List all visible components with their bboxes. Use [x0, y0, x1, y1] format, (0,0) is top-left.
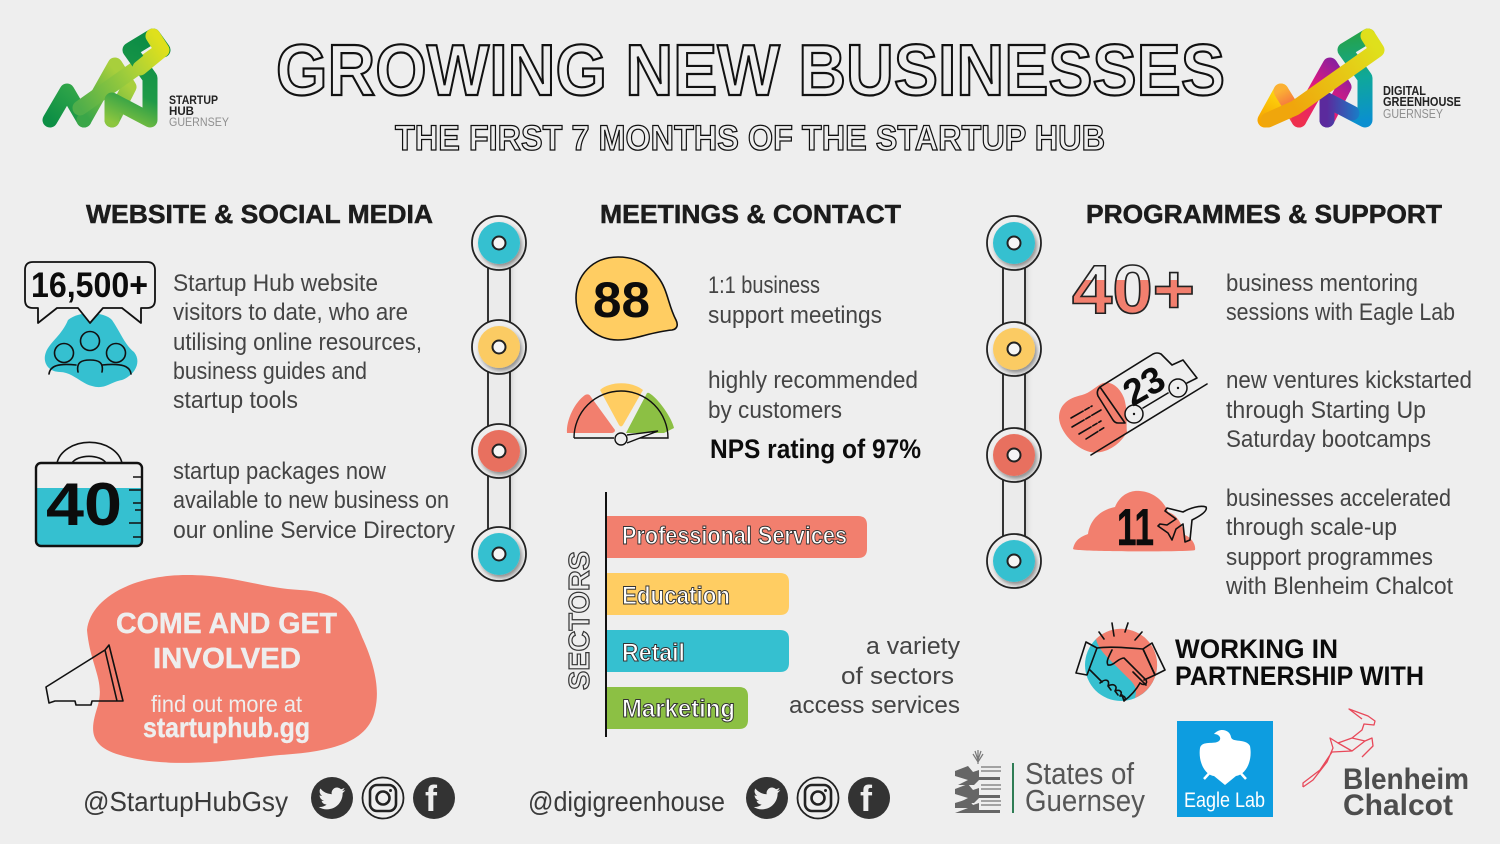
logo: States of Guernsey: States of	[1025, 756, 1134, 791]
icon: megaphone	[46, 645, 123, 705]
text: businesses accelerated: businesses accelerated	[1226, 485, 1451, 512]
text: website visitors: utilising online resources,	[173, 329, 422, 356]
text: startup packages: our online Service Directory	[173, 517, 455, 544]
text: startup packages	[173, 458, 455, 544]
panel: website and social media	[25, 199, 455, 546]
title: GROWING NEW BUSINESSES	[276, 31, 1225, 111]
heading: meetings and contact: MEETINGS & CONTACT	[600, 199, 901, 229]
icon: 11 cloud and plane: 11	[1117, 499, 1154, 557]
social: StartupHubGsy: @StartupHubGsy	[83, 786, 288, 817]
icon: 40 startup package	[36, 442, 142, 546]
icon: 40+ outlined number: 40+	[1072, 251, 1195, 328]
text: variety of sectors	[789, 633, 960, 719]
text: support meetings: support meetings	[708, 302, 882, 329]
logo: Digital Greenhouse Guernsey: DIGITAL	[1383, 84, 1426, 98]
text: new ventures: Saturday bootcamps	[1226, 426, 1431, 453]
text: variety of sectors: of sectors	[841, 663, 954, 690]
icon: 23 car	[1059, 353, 1207, 455]
icon: twitter	[746, 777, 788, 819]
logo: Startup Hub Guernsey: HUB	[169, 104, 194, 118]
text: website visitors: business guides and	[173, 358, 367, 385]
text: NPS rating: NPS rating of 97%	[710, 434, 921, 464]
logo: Startup Hub Guernsey	[50, 36, 229, 129]
bar chart: sectors: Retail	[622, 639, 685, 667]
text: NPS rating	[708, 367, 921, 464]
text: startup packages: available to new business on	[173, 487, 449, 514]
icon: instagram	[362, 778, 404, 818]
text: website visitors: visitors to date, who are	[173, 299, 408, 326]
connector: right timeline	[987, 216, 1041, 588]
icon: 88 yellow blob	[576, 257, 677, 340]
text: variety of sectors: a variety	[866, 633, 960, 660]
icon: recommendation gauge	[567, 383, 674, 445]
text: new ventures: through Starting Up	[1226, 397, 1426, 424]
callout: come and get involved: COME AND GET	[116, 608, 337, 640]
logo: States of Guernsey: Guernsey	[1025, 783, 1145, 818]
social: digigreenhouse: @digigreenhouse	[528, 786, 725, 817]
icon: facebook: f	[425, 778, 438, 819]
text: businesses accelerated: through scale-up	[1226, 514, 1397, 541]
icon: facebook	[848, 777, 890, 819]
social: StartupHubGsy	[83, 777, 455, 819]
text: businesses accelerated	[1225, 485, 1453, 600]
text: website visitors	[173, 270, 422, 414]
icon: facebook	[413, 777, 455, 819]
icon: facebook: f	[860, 778, 873, 819]
logo: Digital Greenhouse Guernsey	[1265, 36, 1461, 121]
icon: twitter	[311, 777, 353, 819]
text: startup packages: startup packages now	[173, 458, 387, 485]
text: support meetings	[708, 272, 882, 329]
icon: people blob	[45, 313, 137, 387]
icon: instagram	[798, 778, 838, 818]
text: variety of sectors: access services	[789, 692, 960, 719]
text: NPS rating: highly recommended	[708, 367, 918, 394]
heading: website and social media: WEBSITE & SOCIAL MEDIA	[86, 199, 433, 229]
text: businesses accelerated: support programmes	[1226, 544, 1433, 571]
logo: Digital Greenhouse Guernsey: GREENHOUSE	[1383, 95, 1461, 109]
text: mentoring sessions: sessions with Eagle Lab	[1226, 299, 1455, 326]
heading: working in partnership: WORKING IN	[1175, 634, 1338, 664]
callout: come and get involved	[46, 575, 377, 763]
text: mentoring sessions	[1226, 270, 1455, 326]
logo: Eagle Lab: Eagle Lab	[1184, 789, 1265, 812]
callout: 16,500+ speech bubble	[25, 262, 155, 323]
panel: working in partnership	[955, 623, 1469, 822]
logo: States of Guernsey	[955, 750, 1145, 818]
connector: left timeline	[472, 216, 526, 581]
heading: working in partnership	[1175, 634, 1424, 691]
social: digigreenhouse	[528, 777, 890, 819]
icon: handshake	[1076, 623, 1165, 701]
bar chart: sectors: Professional Services	[622, 522, 847, 550]
heading: working in partnership: PARTNERSHIP WITH	[1175, 661, 1424, 691]
logo: Blenheim Chalcot	[1303, 709, 1469, 822]
bar chart: sectors	[564, 492, 867, 737]
text: website visitors: startup tools	[173, 387, 298, 414]
text: new ventures	[1226, 367, 1472, 453]
icon: 40 startup package: 40	[46, 471, 122, 538]
bar chart: sectors: Education	[622, 582, 730, 610]
text: mentoring sessions: business mentoring	[1226, 270, 1418, 297]
callout: 16,500+ speech bubble: 16,500+	[31, 266, 148, 305]
logo: Blenheim Chalcot: Blenheim	[1343, 763, 1469, 796]
logo: Blenheim Chalcot: Chalcot	[1343, 789, 1453, 822]
logo: Eagle Lab	[1177, 721, 1273, 817]
logo: Startup Hub Guernsey: GUERNSEY	[169, 115, 229, 129]
text: website visitors: Startup Hub website	[173, 270, 378, 297]
callout: come and get involved: startuphub.gg	[143, 712, 310, 743]
icon: 23 car: 23	[1116, 358, 1172, 414]
bar chart: sectors: SECTORS	[564, 551, 596, 690]
bar chart: sectors: Marketing	[622, 695, 735, 723]
subtitle: THE FIRST 7 MONTHS OF THE STARTUP HUB	[395, 119, 1105, 158]
callout: come and get involved: find out more at	[151, 691, 303, 717]
panel: meetings and contact	[564, 199, 960, 737]
text: businesses accelerated: with Blenheim Chalcot	[1225, 573, 1453, 600]
text: new ventures: new ventures kickstarted	[1226, 367, 1472, 394]
panel: programmes and support	[1059, 199, 1472, 600]
icon: 11 cloud and plane	[1073, 491, 1206, 557]
text: NPS rating: by customers	[708, 397, 842, 424]
heading: programmes and support: PROGRAMMES & SUPPORT	[1086, 199, 1442, 229]
callout: come and get involved: INVOLVED	[153, 643, 301, 675]
logo: Startup Hub Guernsey: STARTUP	[169, 93, 218, 107]
icon: 88 yellow blob: 88	[593, 272, 650, 328]
text: support meetings: 1:1 business	[708, 272, 820, 299]
logo: Digital Greenhouse Guernsey: GUERNSEY	[1383, 107, 1444, 121]
